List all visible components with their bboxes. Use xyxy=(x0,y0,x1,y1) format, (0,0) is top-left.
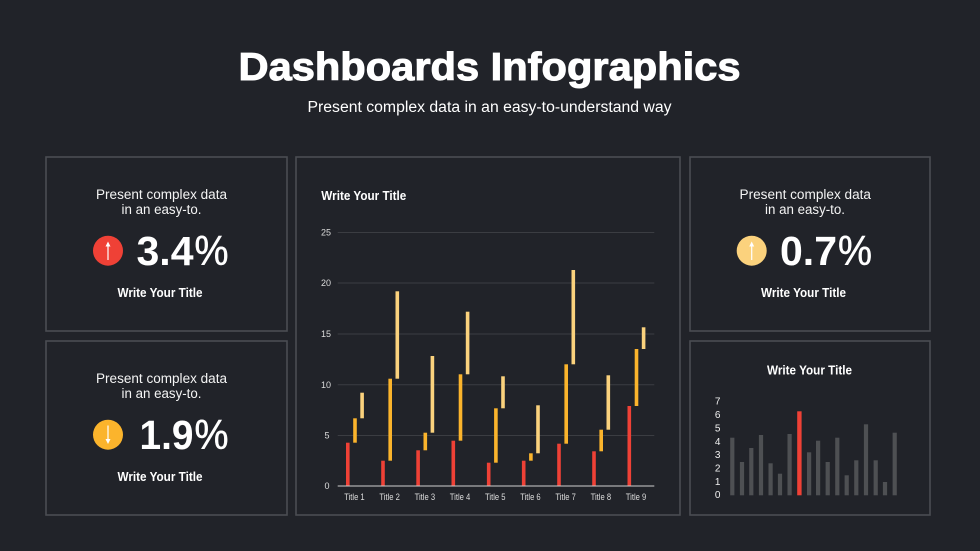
value: 1.9 xyxy=(140,412,194,458)
x axis labels: Title 4 xyxy=(450,492,470,502)
value: 3.4 xyxy=(136,228,194,274)
y axis labels: 15 xyxy=(321,329,331,339)
highlighted red bar xyxy=(797,411,802,495)
chart title: Write Your Title xyxy=(321,188,406,203)
y axis labels: 2 xyxy=(715,464,721,474)
panel title: Write Your Title xyxy=(118,285,202,300)
x axis labels: Title 9 xyxy=(626,492,646,502)
panel title: Write Your Title xyxy=(118,469,202,484)
description text xyxy=(740,187,871,217)
description text xyxy=(96,187,227,217)
x axis labels: Title 2 xyxy=(379,492,400,502)
description text: Present complex data xyxy=(96,371,227,386)
y axis labels: 4 xyxy=(715,437,721,448)
bars: Title 8 xyxy=(592,375,610,486)
value xyxy=(136,227,228,274)
y axis labels: 1 xyxy=(715,477,721,488)
grey bars xyxy=(730,424,897,495)
y axis labels: 7 xyxy=(715,396,721,408)
bars: Title 6 xyxy=(522,405,540,486)
x axis labels: Title 1 xyxy=(344,492,365,502)
panel: stacked floating bar chart xyxy=(296,157,680,515)
y axis labels: 25 xyxy=(321,228,331,238)
value xyxy=(140,411,228,458)
panel title: Write Your Title xyxy=(761,285,846,300)
y axis labels: 3 xyxy=(715,450,721,461)
icon: red up arrow xyxy=(93,236,123,266)
x axis labels: Title 8 xyxy=(591,492,611,502)
x axis labels xyxy=(344,492,646,502)
value: % xyxy=(194,227,228,274)
panel: small bar chart xyxy=(690,341,930,515)
bars: Title 1 xyxy=(346,393,364,486)
y axis labels: 5 xyxy=(715,424,721,434)
x axis labels: Title 6 xyxy=(520,492,541,502)
icon: orange down arrow xyxy=(93,420,123,450)
y axis labels: 20 xyxy=(321,278,331,288)
panel: KPI 0.7% xyxy=(690,157,930,331)
x axis labels: Title 7 xyxy=(555,492,576,502)
y axis labels: 6 xyxy=(715,410,721,421)
bars: Title 2 xyxy=(381,291,399,486)
description text: in an easy-to. xyxy=(122,386,202,401)
value: % xyxy=(194,411,228,458)
panel: KPI 3.4% xyxy=(46,157,287,331)
y axis labels: 0 xyxy=(715,490,721,501)
y axis labels: 0 xyxy=(324,481,330,491)
description text: in an easy-to. xyxy=(765,202,845,217)
value: 0.7 xyxy=(780,228,837,274)
y axis labels xyxy=(715,396,721,501)
y axis labels xyxy=(321,228,331,491)
chart title: Write Your Title xyxy=(767,362,852,377)
value xyxy=(780,227,872,274)
y axis labels: 10 xyxy=(321,380,331,390)
bars: Title 5 xyxy=(487,376,505,486)
bars: Title 9 xyxy=(628,327,645,486)
bars: Title 7 xyxy=(557,270,575,486)
description text xyxy=(96,371,227,401)
x axis labels: Title 3 xyxy=(415,492,435,502)
description text: Present complex data xyxy=(96,187,227,202)
bars: Title 4 xyxy=(452,312,469,486)
description text: in an easy-to. xyxy=(122,202,202,217)
subtitle: Present complex data in an easy-to-understand way xyxy=(308,99,672,116)
value: % xyxy=(838,227,872,274)
bars: Title 3 xyxy=(416,356,434,486)
panel: KPI 1.9% xyxy=(46,341,287,515)
icon: yellow up arrow xyxy=(737,236,767,266)
x axis labels: Title 5 xyxy=(485,492,506,502)
title: Dashboards Infographics xyxy=(238,46,740,89)
y axis labels: 5 xyxy=(324,430,330,440)
description text: Present complex data xyxy=(740,187,871,202)
